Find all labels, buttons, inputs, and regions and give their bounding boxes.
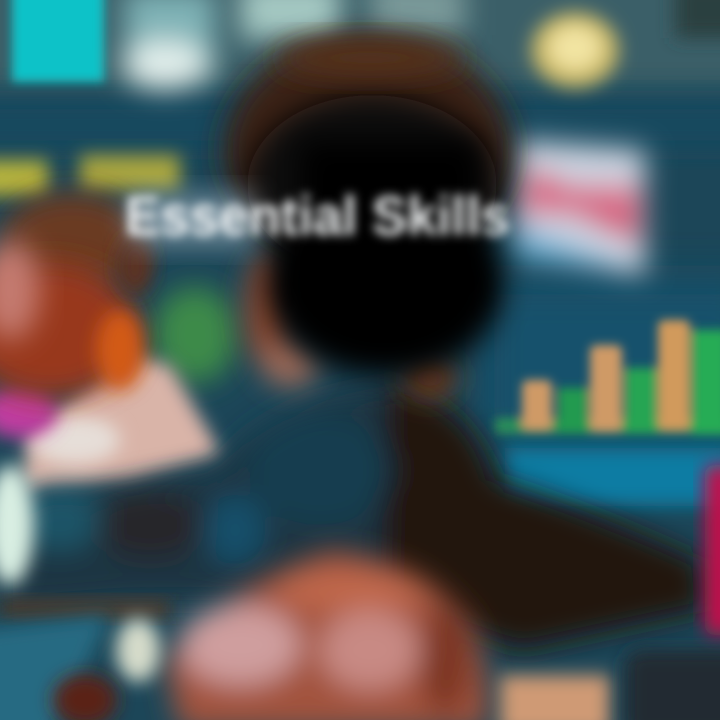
white wrist [116, 618, 160, 682]
person left [0, 192, 222, 490]
pale panel: right [370, 0, 465, 35]
pale panel: centre [240, 0, 340, 40]
dark foreground object [625, 650, 720, 720]
icon: light bulb [531, 12, 619, 88]
face [0, 262, 138, 398]
green panel [153, 287, 237, 383]
dark corner panel [675, 0, 720, 38]
crimson accent [705, 465, 720, 635]
title text: Essential Skills [125, 184, 510, 247]
person centre: torso [0, 385, 705, 650]
bar chart [495, 320, 720, 435]
shirt [20, 355, 222, 490]
sleeve cuff dark red [53, 674, 117, 720]
blue band under chart [505, 448, 720, 506]
hair [0, 192, 144, 288]
teal lower-left [0, 615, 110, 720]
yellow heading text [0, 155, 180, 196]
ear and neck [244, 250, 458, 398]
peach foreground [500, 675, 610, 720]
white sleeve [0, 465, 34, 585]
hand [165, 550, 488, 720]
flag [515, 140, 645, 275]
icon: cyan panel [12, 0, 104, 82]
magenta accent [0, 386, 58, 438]
sleeve edge brown [0, 600, 170, 618]
pale panel: left figure [123, 0, 215, 89]
head [223, 35, 513, 375]
